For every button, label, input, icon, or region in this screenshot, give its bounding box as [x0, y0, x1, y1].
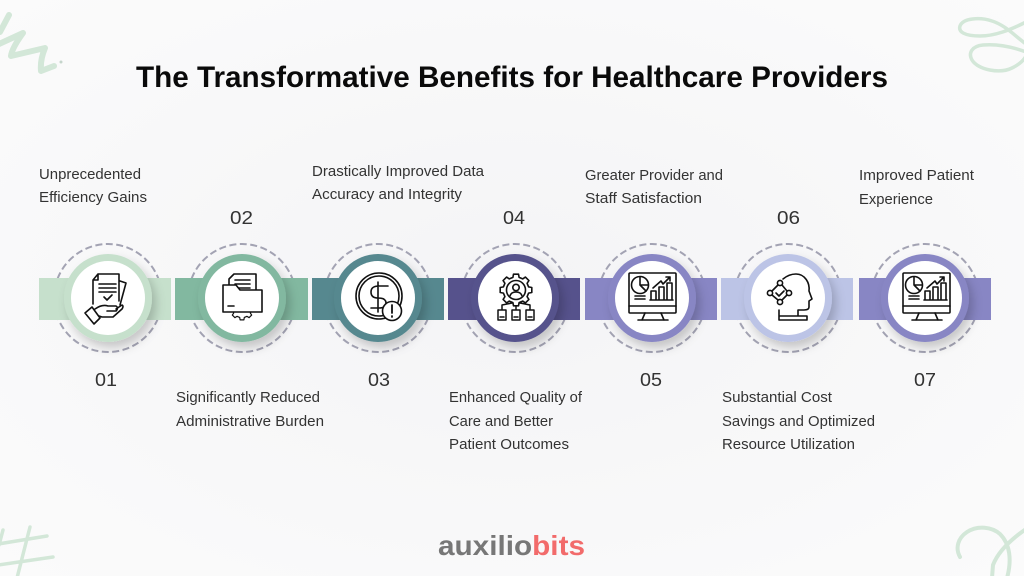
text 02 [176, 390, 324, 430]
step 04 [448, 208, 583, 453]
text 06: Resource Utilization [722, 437, 855, 453]
decorative squiggle: top left [0, 15, 62, 71]
text 04 [449, 390, 583, 453]
step 05 [585, 168, 723, 390]
icon: monitor with charts [629, 273, 676, 320]
decorative loops: top right [960, 19, 1024, 71]
icon: gear with person and documents [498, 274, 534, 320]
text 02: Significantly Reduced [176, 390, 320, 406]
text 04: Care and Better [449, 414, 553, 430]
text 03: Accuracy and Integrity [312, 187, 463, 203]
text 07: Improved Patient [859, 168, 974, 184]
title: The Transformative Benefits for Healthcare Providers [136, 61, 888, 94]
icon: folder with gear [223, 274, 262, 320]
step 06 [721, 208, 875, 453]
label 06: 06 [777, 208, 800, 228]
text 06: Substantial Cost [722, 390, 832, 406]
icon: document on hand [85, 274, 126, 324]
step 07 [859, 168, 991, 390]
step 02 [175, 208, 324, 430]
label 03: 03 [368, 370, 390, 390]
step 03 [312, 164, 485, 390]
label 02: 02 [230, 208, 253, 228]
step 01 [39, 167, 171, 390]
icon: coin with alert [356, 273, 402, 320]
text 07 [859, 168, 974, 208]
text 05: Staff Satisfaction [585, 191, 702, 207]
icon: head with network [767, 274, 812, 320]
text 04: Patient Outcomes [449, 437, 569, 453]
text 03 [312, 164, 485, 203]
text 03: Drastically Improved Data [312, 164, 485, 180]
icon: monitor with charts [903, 273, 950, 320]
text 06 [722, 390, 875, 453]
decorative hash: bottom left [0, 527, 53, 576]
text 07: Experience [859, 192, 933, 208]
text 05 [585, 168, 723, 207]
text 02: Administrative Burden [176, 414, 324, 430]
text 01 [39, 167, 147, 206]
label 05: 05 [640, 370, 662, 390]
decorative curl: bottom right [958, 528, 1024, 576]
text 05: Greater Provider and [585, 168, 723, 184]
text 01: Unprecedented [39, 167, 141, 183]
label 01: 01 [95, 370, 117, 390]
logo: auxiliobits: auxiliobits [438, 530, 585, 561]
label 07: 07 [914, 370, 936, 390]
text 06: Savings and Optimized [722, 414, 875, 430]
text 04: Enhanced Quality of [449, 390, 583, 406]
label 04: 04 [503, 208, 525, 228]
text 01: Efficiency Gains [39, 190, 147, 206]
